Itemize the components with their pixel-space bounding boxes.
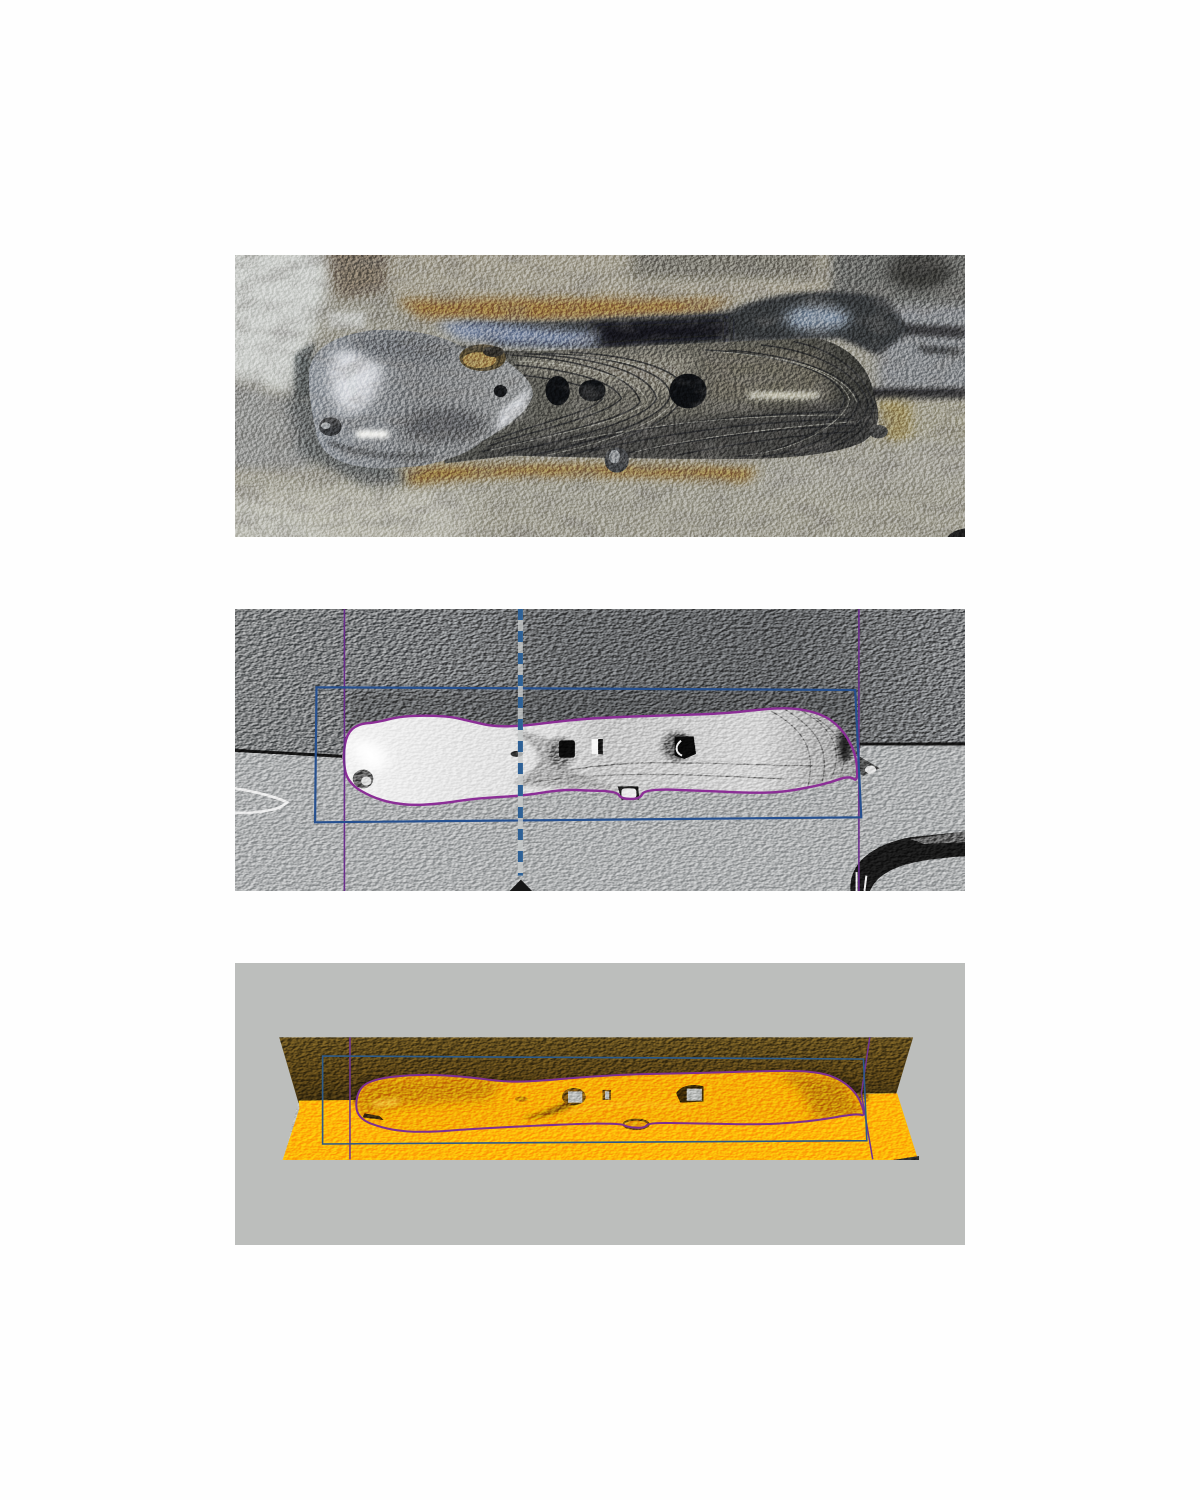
- photo: surface speckle: [235, 255, 965, 537]
- map: bottom right groove: [850, 832, 965, 891]
- render: surface texture: [279, 1037, 919, 1160]
- panel: 3D colour render: [235, 963, 965, 1245]
- photo: spatter and pores: [319, 344, 888, 473]
- map: arrow marker: [510, 880, 532, 891]
- photo: silver left lobe: [305, 322, 533, 472]
- figure: three weld inspection panels: [235, 255, 965, 1245]
- map: boundary lines: [315, 609, 861, 891]
- map: left outline mark: [235, 788, 287, 813]
- render: boundary lines: [323, 1037, 873, 1159]
- photo: grime: [235, 255, 965, 537]
- map: joint edge: [235, 744, 965, 756]
- render: back wall: [279, 1037, 913, 1103]
- render: pores: [515, 1085, 704, 1129]
- render: floor: [283, 1093, 918, 1160]
- render: weld bead: [357, 1072, 863, 1130]
- map: bead outline: [344, 708, 857, 805]
- render: floor corner shadow: [893, 1156, 919, 1160]
- panel: greyscale height map: [235, 609, 965, 891]
- panel: weld photograph: [235, 255, 965, 537]
- map: weld bead: [345, 710, 856, 804]
- render: bead outline: [356, 1071, 864, 1132]
- photo: surrounding metal tones: [212, 245, 989, 555]
- map: surface texture: [235, 609, 965, 891]
- photo: weld bead: [308, 330, 878, 468]
- map: dashed section line: [518, 609, 523, 876]
- map: pores: [353, 732, 880, 800]
